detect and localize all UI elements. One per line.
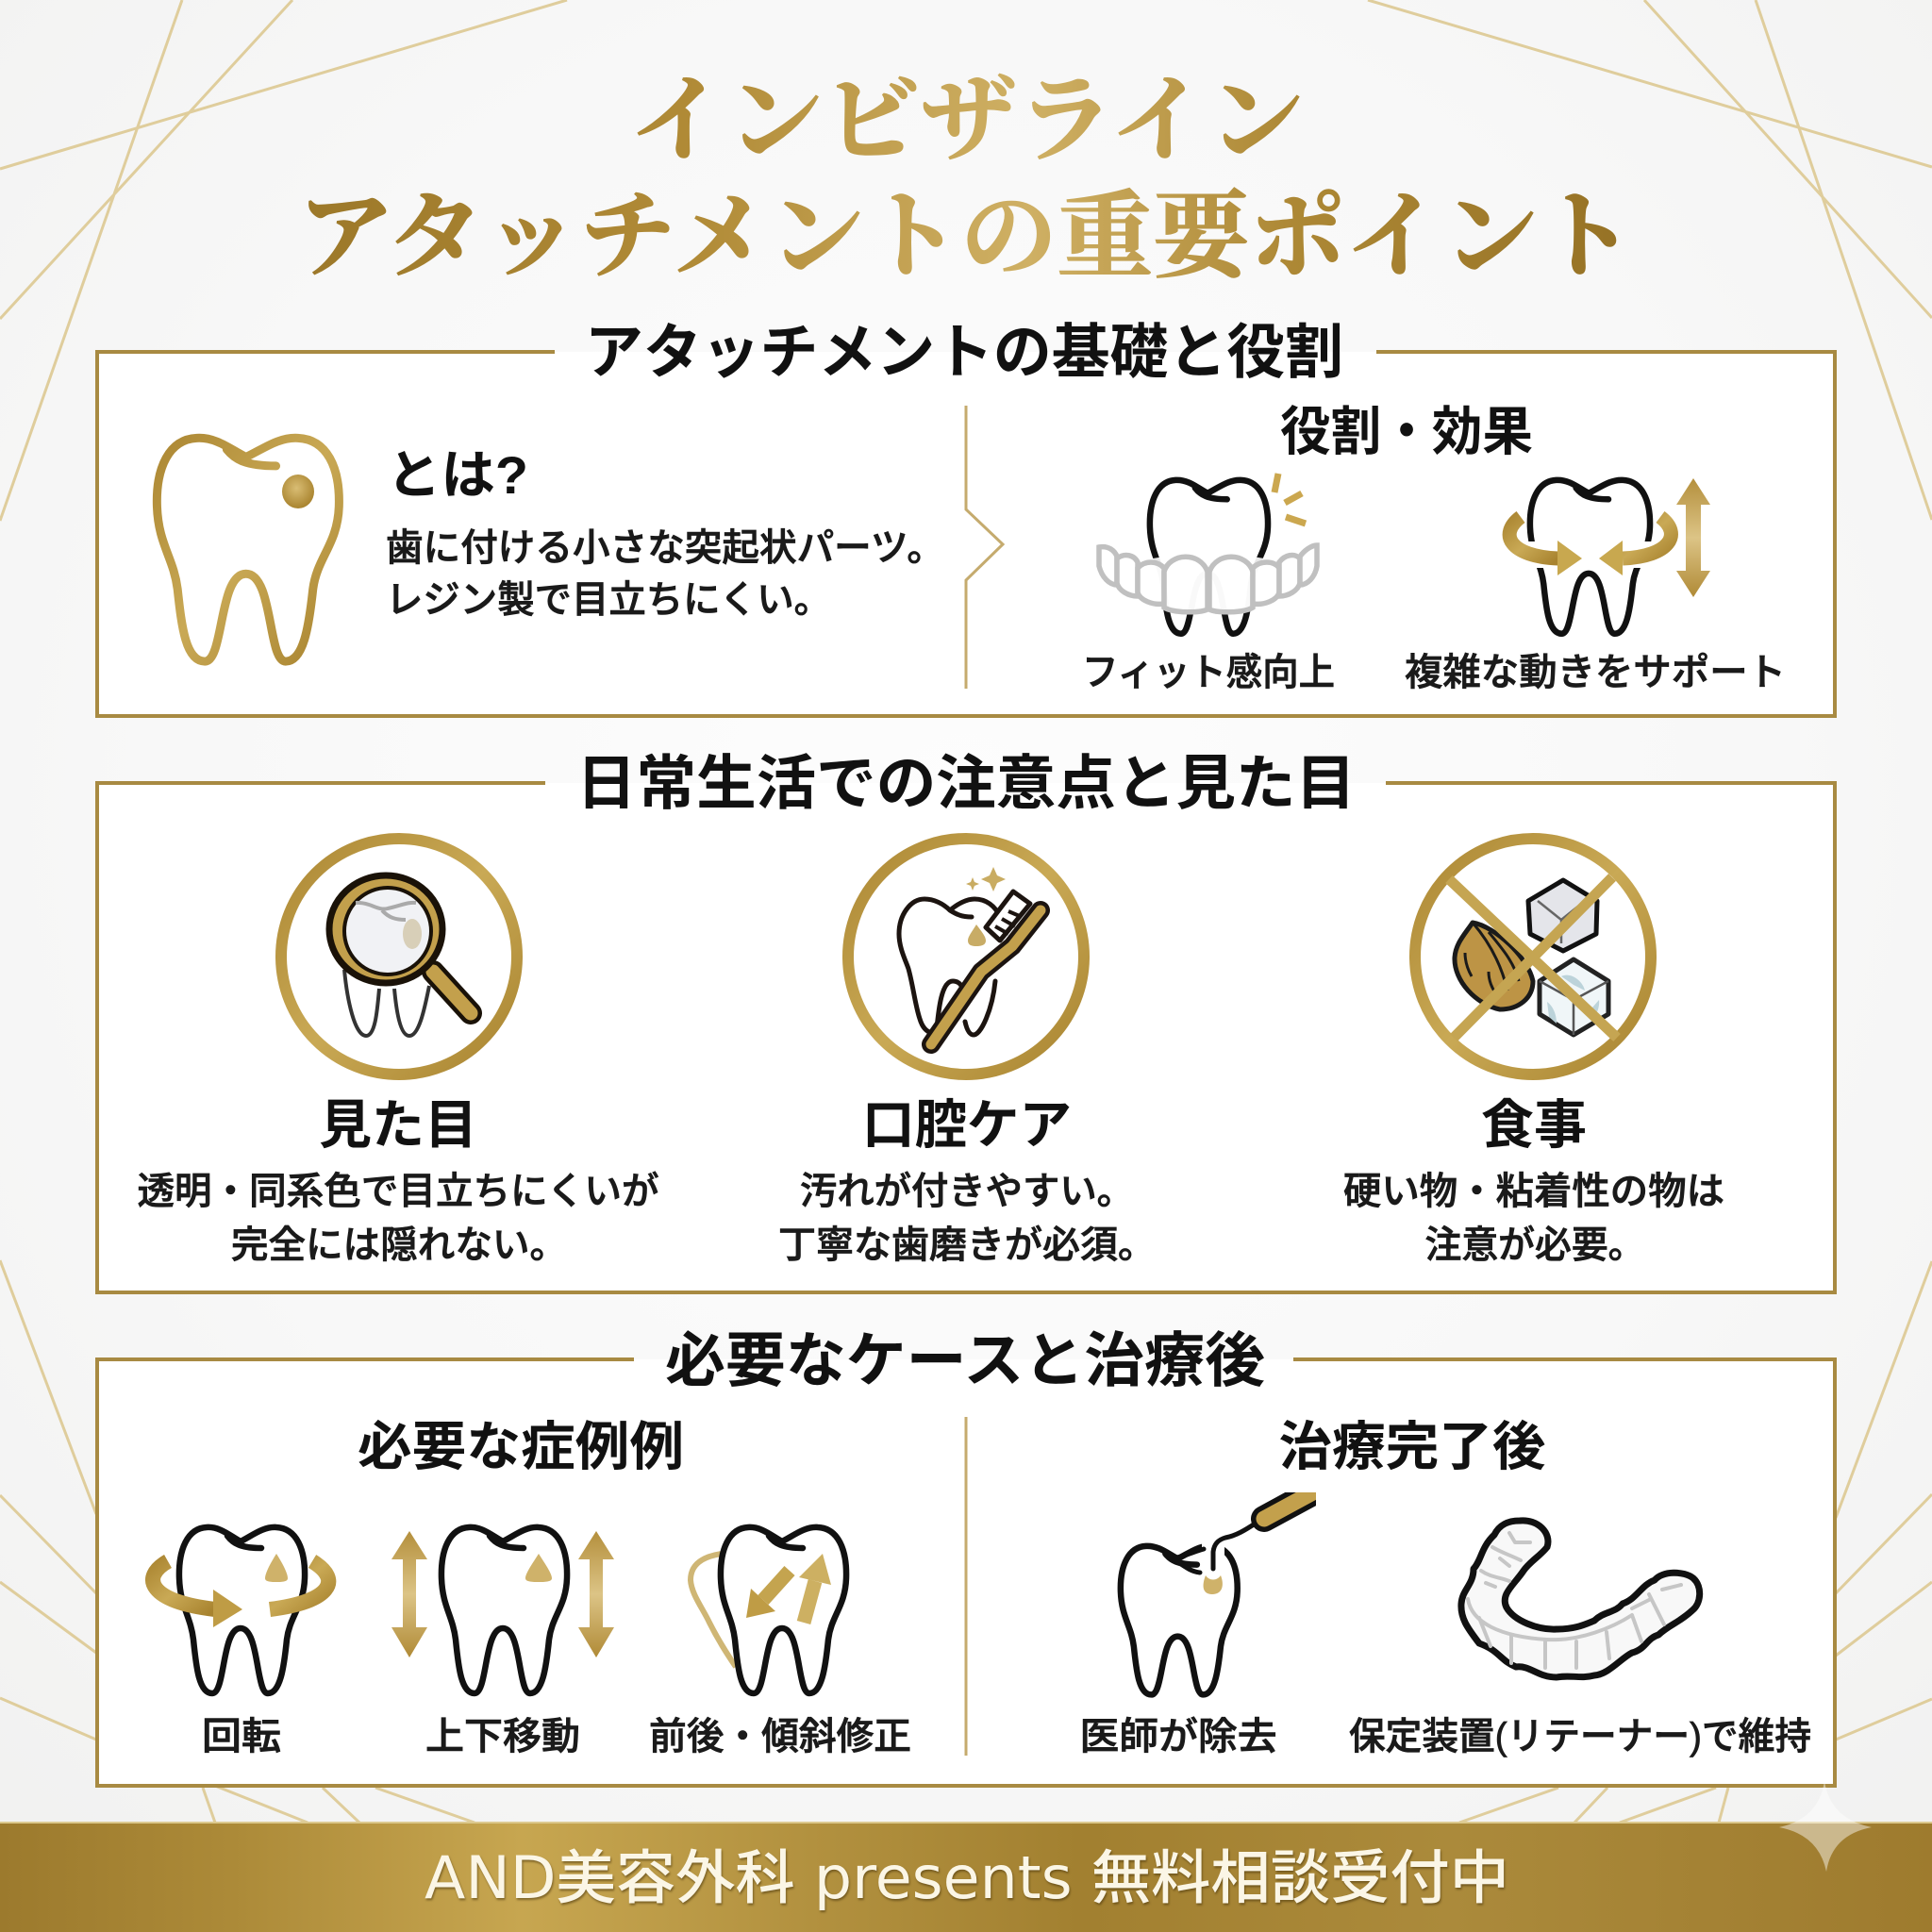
text: food: 硬い物・粘着性の物は	[1343, 1171, 1724, 1212]
label: fit: フィット感向上	[1082, 652, 1335, 693]
text: appearance: 完全には隠れない。	[231, 1224, 567, 1266]
heading: role and effect: 役割・効果	[1280, 402, 1533, 461]
icon: retainer	[1461, 1521, 1700, 1677]
title	[298, 44, 1634, 296]
heading: required cases: 必要な症例例	[358, 1417, 684, 1476]
panel: daily life	[97, 751, 1835, 1292]
text: food: 注意が必要。	[1424, 1224, 1645, 1266]
icon: tilt correction tooth	[691, 1527, 846, 1693]
text: oral care: 丁寧な歯磨きが必須。	[778, 1224, 1156, 1266]
text: appearance: 透明・同系色で目立ちにくいが	[138, 1171, 658, 1212]
text: food	[1343, 1095, 1724, 1266]
icon: rotation tooth	[153, 1527, 328, 1693]
icon: no hard food	[1415, 839, 1651, 1074]
text: food: 食事	[1481, 1095, 1587, 1155]
text: appearance	[138, 1095, 658, 1266]
text: oral care: 汚れが付きやすい。	[800, 1171, 1134, 1212]
icon: vertical movement tooth	[391, 1527, 614, 1693]
heading: daily life: 日常生活での注意点と見た目	[576, 751, 1356, 817]
text: oral care: 口腔ケア	[862, 1095, 1072, 1155]
panel: basics and role	[97, 320, 1835, 716]
heading: after treatment: 治療完了後	[1279, 1417, 1545, 1476]
icon: toothbrush and tooth	[848, 839, 1084, 1074]
text: oral care	[778, 1095, 1156, 1266]
label: tilt correction: 前後・傾斜修正	[649, 1716, 911, 1757]
icon: tooth fitted with aligner	[1099, 474, 1317, 634]
label: doctor removes: 医師が除去	[1079, 1716, 1277, 1757]
text: what is an attachment: 歯に付ける小さな突起状パーツ。	[386, 527, 944, 569]
icon: doctor removes attachment	[1121, 1483, 1330, 1694]
label: complex movement: 複雑な動きをサポート	[1405, 652, 1786, 693]
arrow: divider chevron	[966, 406, 1003, 689]
text: appearance: 見た目	[319, 1095, 477, 1155]
text: what is an attachment: とは?	[387, 445, 528, 505]
heading: basics and role: アタッチメントの基礎と役割	[585, 320, 1343, 386]
panel: cases and after treatment	[97, 1328, 1835, 1786]
icon: gold tooth with attachment	[157, 438, 339, 661]
footer text: AND美容外科 presents 無料相談受付中	[425, 1843, 1509, 1912]
title: アタッチメントの重要ポイント	[298, 160, 1634, 296]
label: retainer: 保定装置(リテーナー)で維持	[1349, 1716, 1811, 1757]
title: インビザライン	[630, 44, 1304, 180]
icon: magnifier over tooth	[281, 839, 517, 1074]
text: what is an attachment	[386, 445, 944, 621]
footer band	[0, 1822, 1932, 1932]
icon: tooth with complex movement arrows	[1509, 478, 1710, 634]
icon: corner sparkle	[1779, 1781, 1872, 1872]
label: vertical movement: 上下移動	[425, 1716, 580, 1757]
text: what is an attachment: レジン製で目立ちにくい。	[386, 579, 831, 621]
heading: cases and after treatment: 必要なケースと治療後	[665, 1328, 1265, 1394]
label: rotation: 回転	[202, 1716, 281, 1757]
